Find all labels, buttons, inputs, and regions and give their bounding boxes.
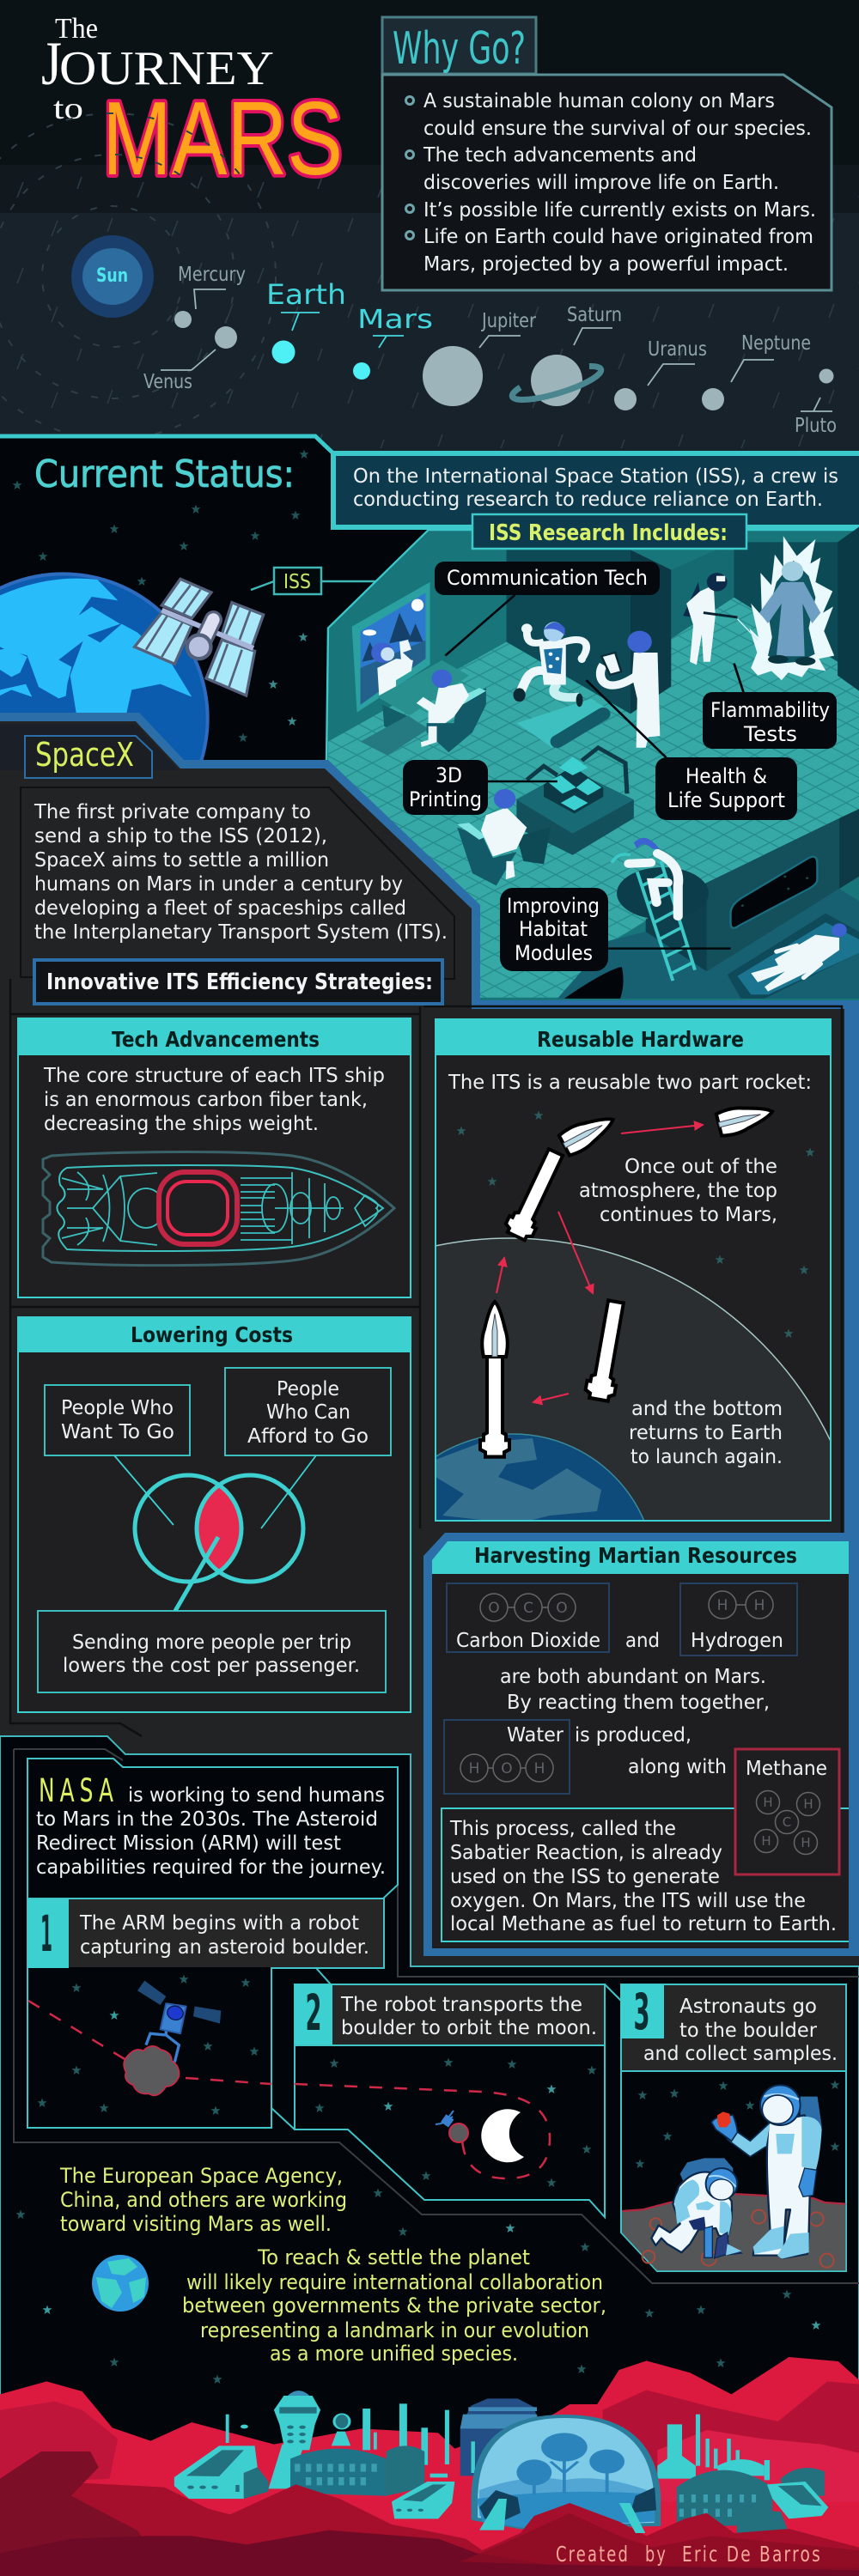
title [41, 13, 343, 197]
small boulder and robot [436, 2111, 468, 2142]
step 2 header: 2 [306, 1984, 321, 2042]
solar system [0, 113, 837, 440]
heading: iss research: ISS Research Includes: [489, 520, 728, 546]
planet labels: Neptune [741, 332, 811, 355]
text block: collaboration: between governments & the private sector, [182, 2293, 606, 2318]
arrows [497, 1125, 703, 1402]
why go text: Mars, projected by a powerful impact. [423, 253, 789, 276]
earth [436, 1433, 644, 1520]
step 3 header: and collect samples. [643, 2043, 838, 2065]
planet labels [143, 264, 837, 437]
box: hydrogen: H [754, 1597, 765, 1614]
planet labels: Mercury [178, 264, 246, 286]
callout: 3d printing [403, 760, 488, 815]
heading [18, 1317, 411, 1352]
panel: tech advancements [18, 1018, 411, 1297]
illustration: iss interior [326, 527, 859, 1005]
text: produced: is produced, [575, 1724, 691, 1747]
ladder person [637, 861, 695, 981]
stars [636, 2080, 840, 2168]
box: people who can afford to go: People [277, 1378, 339, 1400]
text block: spacex: SpaceX aims to settle a million [34, 849, 329, 872]
title: The [55, 13, 98, 45]
heading [432, 1541, 849, 1574]
panel: harvesting martian resources [423, 1533, 859, 1956]
bullets [405, 96, 414, 239]
why go text: discoveries will improve life on Earth. [423, 172, 779, 194]
box: people who want to go [45, 1385, 190, 1455]
moon orbit [295, 2084, 550, 2178]
text block: other agencies: The European Space Agency, [59, 2164, 343, 2188]
why go text: A sustainable human colony on Mars [423, 90, 775, 112]
pylons [362, 2403, 475, 2473]
venn diagram [114, 1455, 316, 1611]
box: methane: H [761, 1833, 771, 1849]
illustration: ship cross section [43, 1152, 394, 1266]
text: produced [575, 1724, 727, 1778]
callout: iss label: ISS [283, 571, 311, 593]
box: carbon dioxide: O [556, 1600, 568, 1617]
text block: spacex: the Interplanetary Transport System (ITS). [34, 921, 448, 944]
text block: spacex: The first private company to [34, 801, 311, 823]
desk [377, 660, 469, 715]
space background and stars [457, 1111, 814, 1338]
callout: improving habitat modules: Modules [515, 941, 593, 965]
credit [556, 2542, 822, 2567]
planet labels: Mars [357, 305, 433, 335]
why go box [382, 75, 832, 290]
text block: collaboration: will likely require international collaboration [186, 2270, 603, 2294]
text: bottom stage: returns to Earth [629, 1422, 783, 1444]
callout: flammability tests: Flammability [710, 698, 830, 722]
callout: health and life support [655, 757, 797, 820]
panel: iss intro: On the International Space Station (ISS), a crew is [353, 465, 838, 488]
callout: flammability tests [703, 692, 837, 749]
treadmill [516, 699, 610, 748]
text block: collaboration: representing a landmark in our evolution [200, 2318, 589, 2342]
panel: iss intro [333, 453, 859, 527]
box: methane: H [763, 1795, 773, 1810]
text block: collaboration: To reach & settle the planet [257, 2245, 530, 2269]
text: top stage [579, 1156, 777, 1226]
box: hydrogen: H [717, 1597, 728, 1614]
illustration: earth [0, 574, 208, 863]
why go text: It’s possible life currently exists on Mars. [423, 199, 816, 222]
step 3 header: to the boulder [679, 2020, 818, 2042]
text: abundant: are both abundant on Mars. [500, 1666, 766, 1688]
moon [481, 2109, 524, 2162]
flame test [749, 536, 834, 680]
planet labels: Venus [143, 371, 192, 393]
stars [12, 450, 309, 742]
heading: innovative its strategies [34, 960, 442, 1004]
heading: innovative its strategies: Innovative ITS Efficiency Strategies: [46, 969, 433, 995]
step 1 header: capturing an asteroid boulder. [80, 1936, 369, 1959]
domed hall [290, 2449, 387, 2496]
text: is an enormous carbon fiber tank, [44, 1089, 368, 1111]
nasa text: Redirect Mission (ARM) will test [36, 1832, 341, 1855]
why go text: could ensure the survival of our species. [423, 118, 812, 140]
text block: spacex: humans on Mars in under a century by [34, 873, 403, 896]
text block: spacex: send a ship to the ISS (2012), [34, 825, 327, 848]
box: methane: Methane [746, 1758, 827, 1780]
panel: step 3 [621, 1983, 846, 2271]
panel: iss intro: conducting research to reduce reliance on Earth. [353, 489, 823, 511]
heading: iss research [472, 514, 746, 549]
box: water: H [534, 1760, 545, 1777]
box: methane: C [783, 1814, 791, 1830]
dome supports [479, 2499, 507, 2530]
text: top stage: Once out of the [624, 1156, 777, 1178]
title: J [41, 29, 62, 98]
habitat modules [174, 2445, 258, 2499]
label: spacex: SpaceX [35, 736, 134, 774]
step 2 header [295, 1984, 605, 2045]
person at printer [457, 828, 516, 885]
box: people who can afford to go: Afford to Go [247, 1425, 369, 1448]
panel: its background [0, 717, 859, 1966]
box: sabatier process: local Methane as fuel to return to Earth. [450, 1913, 837, 1935]
sun [71, 235, 154, 318]
callout: 3d printing: Printing [409, 787, 482, 811]
background stars [15, 2188, 821, 2384]
box: carbon dioxide: O [488, 1600, 500, 1617]
callout: health and life support: Life Support [667, 788, 785, 812]
nasa text: NASA [39, 1772, 119, 1809]
text [43, 1065, 385, 1135]
text: bottom stage: to launch again. [631, 1446, 783, 1468]
text: bottom stage [629, 1398, 783, 1468]
standing astronaut [801, 2097, 822, 2158]
box: sabatier process: This process, called the [449, 1818, 676, 1840]
stars [38, 1975, 259, 2115]
why go text: The tech advancements and [423, 144, 697, 167]
step 1 header: 1 [40, 1905, 52, 1963]
why go tab [382, 17, 536, 74]
text block: collaboration: as a more unified species. [270, 2342, 518, 2366]
nasa text [36, 1772, 386, 1879]
panel: lowering costs [18, 1317, 411, 1712]
text: The core structure of each ITS ship [43, 1065, 385, 1087]
planet labels: Pluto [795, 415, 837, 437]
sleeping person [751, 935, 839, 992]
planet labels: Jupiter [480, 310, 536, 332]
step 1 header: The ARM begins with a robot [79, 1912, 359, 1935]
right hall [677, 2470, 772, 2527]
box: people who can afford to go: Who Can [266, 1401, 350, 1424]
box: people who want to go: People Who [61, 1397, 174, 1419]
callout: communication tech: Communication Tech [447, 566, 648, 590]
box: sending more people [38, 1611, 386, 1692]
callout: improving habitat modules: Habitat [519, 917, 588, 941]
back mountains [0, 2357, 859, 2576]
text: intro: The ITS is a reusable two part rocket: [448, 1072, 812, 1094]
title: OURNEY [59, 42, 274, 95]
title: MARS [102, 80, 343, 197]
step 2 header: boulder to orbit the moon. [341, 2017, 597, 2039]
woman with tablet [632, 653, 660, 748]
box: carbon dioxide [447, 1583, 609, 1652]
panel: nasa [27, 1759, 398, 2128]
observation tower [288, 2391, 309, 2396]
text: abundant [500, 1666, 770, 1714]
lower block [707, 818, 839, 971]
planet labels: Saturn [567, 304, 622, 326]
heading: Reusable Hardware [537, 1027, 744, 1052]
box: sabatier process: used on the ISS to generate [450, 1866, 720, 1888]
text: decreasing the ships weight. [44, 1113, 319, 1135]
callout: improving habitat modules [500, 888, 608, 971]
box: sabatier process [442, 1808, 849, 1941]
text block: spacex [21, 787, 454, 979]
why go text [423, 90, 816, 276]
atmosphere [436, 1237, 830, 1520]
sun: Sun [96, 265, 128, 287]
text: abundant: By reacting them together, [507, 1692, 770, 1714]
step 3 header [621, 1983, 846, 2071]
icon: globe [92, 2255, 149, 2312]
box: water: Water [507, 1724, 564, 1747]
box: people who want to go: Want To Go [61, 1421, 174, 1443]
callout: communication tech [435, 562, 660, 595]
kneeling astronaut [680, 2158, 733, 2184]
heading [18, 1018, 411, 1055]
panel: reusable hardware [435, 1018, 832, 1522]
credit: by [645, 2542, 667, 2567]
credit: Created [556, 2542, 630, 2567]
text: top stage: atmosphere, the top [579, 1180, 777, 1202]
step 1 header [27, 1899, 384, 1968]
callout: flammability tests: Tests [743, 722, 797, 746]
heading: Lowering Costs [131, 1322, 293, 1347]
box: sending more people: lowers the cost per passenger. [63, 1655, 360, 1677]
text block: other agencies: China, and others are working [60, 2188, 347, 2212]
title: to [53, 91, 83, 125]
step 3 header: Astronauts go [679, 1996, 817, 2018]
leaders [445, 595, 744, 949]
callout: health and life support: Health & [685, 764, 767, 788]
panel: current status background [0, 436, 430, 766]
box: hydrogen [680, 1583, 797, 1656]
illustration: space station [135, 579, 264, 696]
callout: improving habitat modules: Improving [507, 894, 600, 918]
box: water: H [469, 1760, 479, 1777]
asteroid [124, 2046, 180, 2095]
text: produced: along with [628, 1756, 727, 1778]
box: water: O [501, 1760, 513, 1777]
seated person [427, 688, 486, 752]
text block: other agencies: toward visiting Mars as well. [60, 2212, 332, 2236]
heading: why go: Why Go? [393, 23, 526, 75]
sprayer [683, 582, 704, 619]
box: carbon dioxide: Carbon Dioxide [456, 1630, 600, 1652]
screen [352, 582, 430, 713]
planet leaders [161, 289, 832, 411]
box: sending more people: Sending more people per trip [72, 1631, 351, 1654]
panel: step 2 [271, 1968, 621, 2217]
illustration: mars landscape and colony [0, 2357, 859, 2576]
nasa text: capabilities required for the journey. [36, 1856, 386, 1879]
nasa text: to Mars in the 2030s. The Asteroid [36, 1808, 378, 1831]
box: sabatier process: oxygen. On Mars, the ITS will use the [450, 1890, 806, 1912]
illustration: astronauts on the asteroid [622, 2085, 845, 2270]
box: carbon dioxide: C [523, 1600, 533, 1617]
text: bottom stage: and the bottom [631, 1398, 783, 1420]
heading: Harvesting Martian Resources [474, 1543, 797, 1568]
box: people who can afford to go [225, 1368, 391, 1455]
box: hydrogen: Hydrogen [691, 1630, 783, 1652]
dashed path [28, 2001, 271, 2084]
heading: Tech Advancements [112, 1027, 320, 1052]
text block: spacex: developing a fleet of spaceships called [34, 897, 406, 920]
heading [436, 1019, 831, 1055]
striped tower building [460, 2398, 539, 2476]
box: sabatier process: Sabatier Reaction, is already [450, 1842, 722, 1864]
panel: nasa background [0, 1736, 859, 2576]
callout: 3d printing: 3D [436, 763, 462, 787]
step 2 header: The robot transports the [340, 1994, 582, 2016]
box: water [444, 1720, 570, 1794]
nasa text: is working to send humans [128, 1784, 385, 1807]
box: methane: H [803, 1796, 813, 1812]
stars [314, 2057, 596, 2187]
rocket stages [480, 1099, 776, 1457]
planet labels: Earth [266, 278, 346, 311]
box: methane: H [801, 1835, 811, 1850]
callout: iss label [251, 568, 378, 594]
running person [520, 671, 547, 692]
text block: other agencies [59, 2164, 347, 2236]
heading: current status: Current Status: [34, 453, 295, 496]
text block: collaboration [182, 2245, 606, 2366]
text: top stage: continues to Mars, [600, 1204, 777, 1226]
planet labels: Uranus [648, 338, 707, 361]
robot [137, 1981, 221, 2063]
foreground mountains [0, 2479, 859, 2576]
3d printer [516, 769, 634, 855]
text: and: and [625, 1630, 660, 1652]
panel: why go [382, 17, 832, 290]
planets [174, 311, 833, 410]
dome [474, 2416, 657, 2527]
box: methane [735, 1749, 839, 1874]
why go text: Life on Earth could have originated from [423, 226, 813, 248]
step 3 header: 3 [634, 1983, 649, 2041]
